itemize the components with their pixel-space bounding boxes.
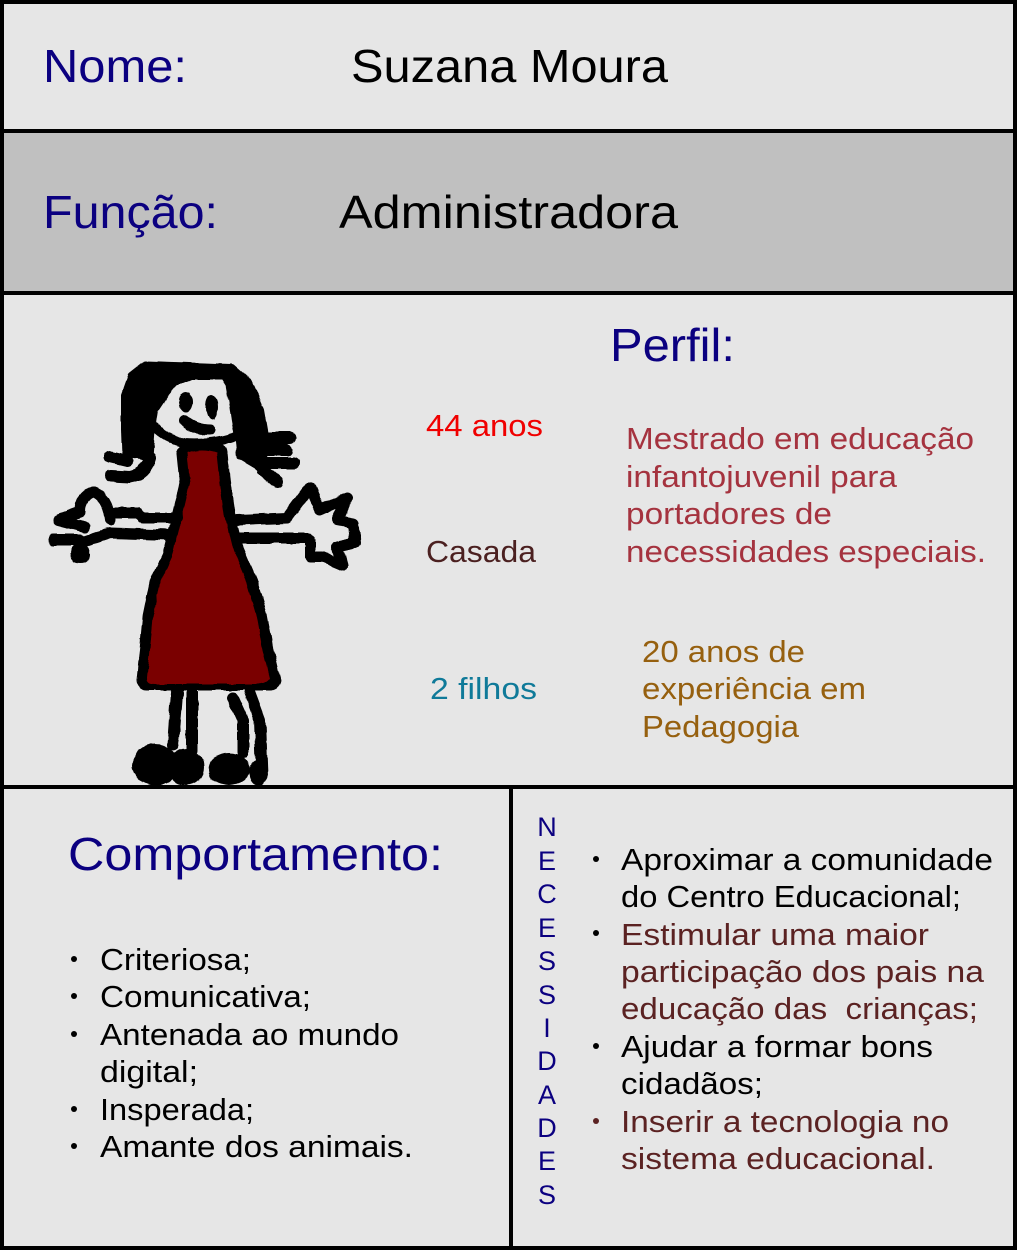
list: comportamento: Comunicativa; [100, 979, 311, 1014]
illustration: hand-drawn woman [53, 364, 355, 786]
panel: comportamento [0, 0, 511, 1248]
text: filhos: 2 filhos [430, 671, 537, 706]
text: experiencia: 20 anos de [642, 634, 805, 669]
list: necessidades: Aproximar a comunidade [621, 842, 993, 877]
text: formacao: portadores de [626, 496, 832, 531]
text: estado civil: Casada [426, 534, 537, 569]
heading: necessidades (vertical): D [537, 1113, 557, 1143]
list: comportamento: Insperada; [100, 1092, 254, 1127]
heading: necessidades (vertical): S [538, 946, 556, 976]
heading: necessidades (vertical): C [537, 879, 557, 909]
heading: necessidades (vertical): E [538, 1146, 556, 1176]
list: necessidades: sistema educacional. [621, 1141, 935, 1176]
list: comportamento: Antenada ao mundo [100, 1017, 399, 1052]
value: nome: Suzana Moura [351, 40, 668, 92]
heading: nome: Nome: [43, 40, 187, 92]
heading: necessidades (vertical): I [543, 1013, 551, 1043]
heading: perfil: Perfil: [610, 319, 735, 371]
list: necessidades: Ajudar a formar bons [621, 1029, 933, 1064]
heading: comportamento: Comportamento: [68, 828, 443, 880]
list: necessidades: educação das crianças; [621, 991, 978, 1026]
value: funcao: Administradora [339, 186, 678, 238]
heading: necessidades (vertical): A [538, 1080, 556, 1110]
list: necessidades: participação dos pais na [621, 954, 985, 989]
panel: perfil [0, 0, 1015, 787]
panel: nome [2, 2, 1015, 131]
shoes [132, 744, 267, 786]
text: formacao: necessidades especiais. [626, 534, 986, 569]
heading: funcao: Função: [43, 186, 218, 238]
text: formacao: Mestrado em educação [626, 421, 974, 456]
heading: necessidades (vertical): S [538, 1180, 556, 1210]
hair [110, 364, 294, 482]
list: comportamento: Amante dos animais. [100, 1129, 413, 1164]
list: comportamento [0, 0, 422, 1164]
left hand thumb [70, 543, 90, 563]
heading: necessidades (vertical): E [538, 846, 556, 876]
legs [173, 693, 262, 777]
arms and hands [53, 487, 355, 565]
heading: necessidades (vertical): D [537, 1046, 557, 1076]
list: comportamento: Criteriosa; [100, 942, 251, 977]
text: experiencia: Pedagogia [642, 709, 800, 744]
heading: necessidades (vertical): E [538, 913, 556, 943]
face [155, 392, 240, 443]
list: comportamento: digital; [100, 1054, 198, 1089]
heading: necessidades (vertical): S [538, 980, 556, 1010]
list: necessidades: Estimular uma maior [621, 917, 929, 952]
text: formacao: infantojuvenil para [626, 459, 898, 494]
list: necessidades: Inserir a tecnologia no [621, 1104, 949, 1139]
heading: necessidades (vertical): N [537, 812, 557, 842]
text: experiencia: experiência em [642, 671, 866, 706]
dress [147, 450, 270, 684]
list: necessidades: do Centro Educacional; [621, 879, 961, 914]
panel: funcao [2, 131, 1015, 293]
text: idade: 44 anos [426, 408, 543, 443]
list: necessidades: cidadãos; [621, 1066, 763, 1101]
